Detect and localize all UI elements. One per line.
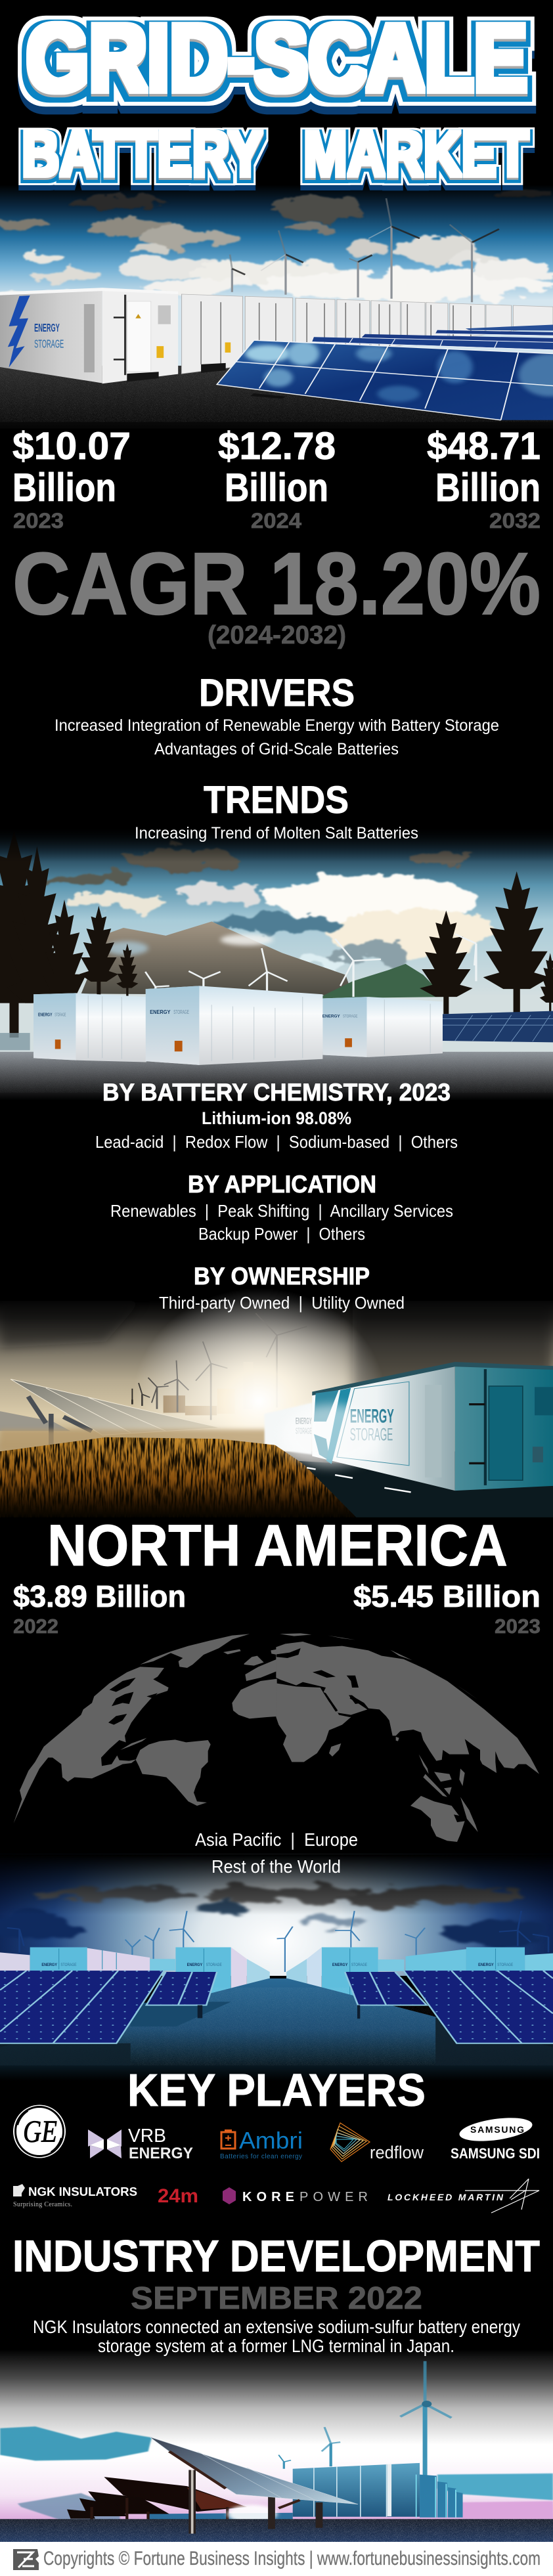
energy storage container: ENERGY xyxy=(350,1405,394,1427)
stat: 2032 market size: $48.71 xyxy=(427,425,541,468)
segment: by ownership xyxy=(159,1263,405,1313)
hero photo: battery containers and solar panels under blue sky xyxy=(0,185,553,429)
containers: ENERGY xyxy=(38,1012,52,1017)
segment: by application: Backup Power | Others xyxy=(198,1224,365,1244)
heading: key players: KEY PLAYERS xyxy=(127,2064,426,2116)
text: molten salt trend: Increasing Trend of Molten Salt Batteries xyxy=(135,824,418,842)
first container with lightning logo: STORAGE xyxy=(34,338,64,351)
text: other regions: Asia Pacific | Europe xyxy=(195,1829,358,1850)
text: NGK development description: storage system at a former LNG terminal in Japan. xyxy=(98,2336,454,2356)
logo: KorePower: POWER xyxy=(299,2190,368,2204)
logo: KorePower xyxy=(223,2187,368,2204)
energy storage container: ENERGY xyxy=(296,1416,312,1426)
logo: VRB Energy: VRB xyxy=(128,2126,166,2147)
logo: GE: GE xyxy=(23,2114,57,2149)
world globe map xyxy=(14,1633,539,1842)
containers: STORAGE xyxy=(55,1012,66,1017)
Africa, Eurasia and Australia xyxy=(276,1633,539,1842)
far containers: STORAGE xyxy=(206,1962,222,1967)
logo: VRB Energy: ENERGY xyxy=(129,2145,193,2162)
text: other regions xyxy=(195,1829,358,1877)
ground under container xyxy=(296,1461,553,1517)
title: Battery Market: BATTERY xyxy=(22,118,263,190)
far containers: ENERGY xyxy=(332,1962,348,1967)
logo: Lockheed Martin xyxy=(387,2179,539,2213)
stat: North America 2023 xyxy=(353,1579,541,1638)
far containers: ENERGY xyxy=(478,1962,494,1967)
distant buildings xyxy=(164,1362,254,1415)
solar field xyxy=(443,1011,553,1042)
clouds xyxy=(0,188,553,300)
ground xyxy=(0,2519,553,2543)
segment: by ownership: Third-party Owned | Utility Owned xyxy=(159,1293,405,1313)
logo: Lockheed Martin: LOCKHEED MARTIN xyxy=(387,2192,504,2202)
drivers list: Advantages of Grid-Scale Batteries xyxy=(154,740,399,758)
stat: 2032 market size: Billion xyxy=(435,466,541,510)
trees xyxy=(0,831,553,1037)
logo: VRB Energy xyxy=(88,2126,193,2162)
logo: Ambri: Ambri xyxy=(239,2127,303,2154)
date: September 2022: SEPTEMBER 2022 xyxy=(131,2281,422,2316)
stat: North America 2023: 2023 xyxy=(495,1615,541,1638)
logo: NGK Insulators: NGK INSULATORS xyxy=(28,2185,137,2198)
stat: North America 2022: $3.89 Billion xyxy=(13,1579,186,1613)
front solar array xyxy=(217,340,553,420)
segment: by battery chemistry: Lithium-ion 98.08% xyxy=(202,1108,351,1128)
drivers list xyxy=(55,716,499,758)
heading: drivers: DRIVERS xyxy=(199,672,355,714)
logo: GE xyxy=(13,2105,66,2158)
battery cabinets xyxy=(293,2463,463,2518)
heading: trends: TRENDS xyxy=(204,779,349,821)
far containers: STORAGE xyxy=(60,1962,77,1967)
logo: Samsung SDI: SAMSUNG xyxy=(470,2124,524,2135)
title: Battery Market xyxy=(22,118,529,190)
segment: by application: BY APPLICATION xyxy=(188,1171,376,1198)
segment: by battery chemistry: BY BATTERY CHEMISTRY, 2023 xyxy=(102,1079,451,1106)
logo: Samsung SDI xyxy=(451,2114,540,2162)
photo: containers in mountain landscape xyxy=(0,827,553,1102)
row of containers receding xyxy=(182,294,553,374)
turbines xyxy=(145,934,476,997)
stat: 2032 market size xyxy=(427,425,541,533)
energy storage container: STORAGE xyxy=(350,1425,393,1445)
solar panels left xyxy=(0,1971,217,2043)
photo: solar panels and batteries at dawn xyxy=(0,2349,553,2543)
containers: ENERGY xyxy=(150,1009,170,1015)
energy storage container xyxy=(296,1362,553,1492)
segment: by battery chemistry xyxy=(95,1079,458,1152)
logo: Ambri: Batteries for clean energy xyxy=(220,2153,302,2160)
segment: by ownership: BY OWNERSHIP xyxy=(194,1263,370,1290)
rear dark solar panels xyxy=(67,2477,247,2525)
containers: STORAGE xyxy=(173,1009,189,1015)
photo: sunset solar field and energy storage container xyxy=(0,1288,553,1517)
ground xyxy=(0,1978,553,2082)
footer bar xyxy=(0,2542,553,2576)
stat: 2023 market size xyxy=(12,425,131,533)
solar panels right xyxy=(345,1971,553,2043)
heading: North America: NORTH AMERICA xyxy=(47,1512,508,1578)
first container with lightning logo xyxy=(0,288,178,383)
containers: ENERGY xyxy=(322,1014,340,1019)
segment: by battery chemistry: Lead-acid | Redox Flow | Sodium-based | Others xyxy=(95,1132,458,1152)
solar panel xyxy=(0,1379,268,1454)
far containers: STORAGE xyxy=(497,1962,513,1967)
logo: Samsung SDI: SAMSUNG SDI xyxy=(451,2145,540,2162)
drivers list: Increased Integration of Renewable Energy with Battery Storage xyxy=(55,716,499,735)
containers xyxy=(33,986,443,1065)
stat: North America 2022: 2022 xyxy=(13,1615,58,1638)
stat: 2024 market size: 2024 xyxy=(251,509,301,533)
stat: North America 2022 xyxy=(13,1579,186,1638)
logo: Ambri xyxy=(220,2127,303,2160)
back containers xyxy=(265,1403,312,1454)
icon: Fortune Business Insights logo xyxy=(13,2549,39,2570)
wheat field xyxy=(0,1437,356,1517)
CAGR period: (2024-2032) xyxy=(208,621,346,649)
storm clouds xyxy=(0,1887,546,1944)
text: other regions: Rest of the World xyxy=(211,1856,341,1877)
containers: STORAGE xyxy=(343,1014,358,1019)
logo: redflow xyxy=(330,2123,424,2162)
stat: 2023 market size: $10.07 xyxy=(12,425,131,468)
energy storage container: STORAGE xyxy=(296,1426,312,1435)
text: NGK development description xyxy=(33,2317,520,2356)
photo: solar and container farm at dusk xyxy=(0,1854,553,2082)
stat: 2024 market size: Billion xyxy=(225,466,328,510)
ground xyxy=(0,1052,553,1102)
far containers: STORAGE xyxy=(351,1962,367,1967)
rear solar rows xyxy=(312,324,553,350)
far containers: ENERGY xyxy=(41,1962,57,1967)
teal clouds xyxy=(0,2426,152,2460)
logo: 24m: 24m xyxy=(158,2185,198,2207)
first container with lightning logo: ENERGY xyxy=(34,322,60,334)
sun glow xyxy=(132,1288,386,1514)
turbines xyxy=(278,2361,451,2476)
stat: North America 2023: $5.45 Billion xyxy=(353,1579,541,1613)
logo: redflow: redflow xyxy=(370,2143,424,2162)
stat: 2023 market size: Billion xyxy=(12,466,116,510)
far containers: ENERGY xyxy=(187,1962,203,1967)
turbines xyxy=(7,1911,548,1972)
stat: 2023 market size: 2023 xyxy=(13,509,64,533)
stat: 2024 market size xyxy=(218,425,336,533)
stat: 2032 market size: 2032 xyxy=(489,509,541,533)
far containers xyxy=(0,1947,553,2002)
clouds xyxy=(39,849,504,965)
logo: NGK Insulators xyxy=(13,2184,137,2208)
turbines xyxy=(132,1313,307,1420)
logo: KorePower: KORE xyxy=(242,2190,294,2204)
Americas, Greenland and west Europe xyxy=(14,1634,277,1823)
segment: by application xyxy=(110,1171,453,1244)
logo: NGK Insulators: Surprising Ceramics. xyxy=(13,2201,72,2208)
ground xyxy=(0,366,553,429)
segment: by application: Renewables | Peak Shifting | Ancillary Services xyxy=(110,1201,453,1221)
stat: 2024 market size: $12.78 xyxy=(218,425,336,468)
glare xyxy=(227,2504,277,2523)
mountains xyxy=(81,921,445,999)
wind turbines xyxy=(230,198,499,302)
main solar panel xyxy=(150,2437,358,2533)
